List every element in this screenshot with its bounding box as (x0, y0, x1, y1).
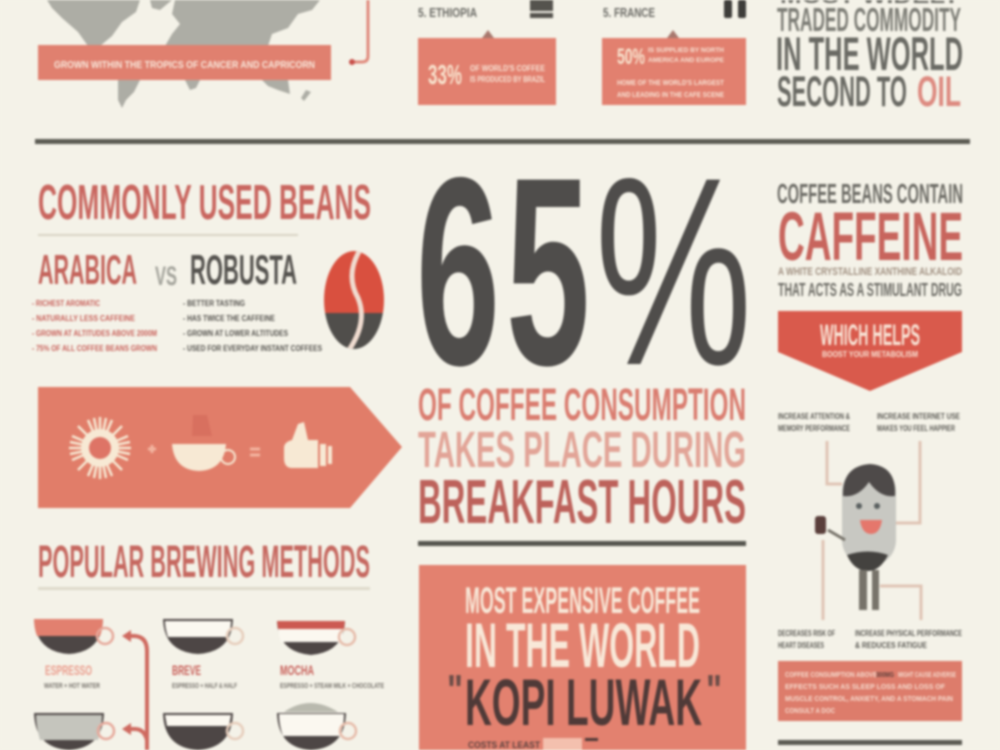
connector arrow from map (349, 0, 368, 65)
icon: France stat (724, 0, 746, 18)
consumer column: France: 5. FRANCE (603, 5, 655, 20)
bean comparison (32, 246, 390, 353)
equals sign (250, 449, 260, 455)
top-right statement (776, 0, 963, 116)
cup: breve (163, 619, 243, 690)
consumer column: France (602, 0, 746, 105)
panel: kopi luwak (419, 565, 746, 750)
note box: EFFECTS SUCH AS SLEEP LOSS AND LOSS OF (785, 684, 946, 691)
callout: France: AND LEADING IN THE CAFE SCENE (617, 92, 724, 99)
benefit labels: DECREASES RISK OF (778, 629, 835, 638)
top-right statement: OIL (917, 68, 961, 116)
arrow panel: sun + coffee = thumbs up (38, 387, 402, 508)
plus sign (148, 445, 156, 453)
callout: Ethiopia: 33% (428, 59, 462, 90)
robusta bullet list: - GROWN AT LOWER ALTITUDES (183, 329, 289, 338)
callout: France (602, 30, 746, 105)
icon: Ethiopia stat (530, 0, 553, 18)
cup: mocha: ESPRESSO + STEAM MILK + CHOCOLATE (280, 683, 384, 690)
caffeine heading (777, 178, 963, 300)
versus label: VS (155, 261, 177, 291)
cup: macchiato (163, 713, 243, 750)
note box: CONSULT A DOC (785, 708, 835, 715)
arabica bullet list: - GROWN AT ALTITUDES ABOVE 2000M (32, 329, 157, 338)
robusta bullet list: - USED FOR EVERYDAY INSTANT COFFEES (183, 344, 323, 353)
big number 65%: 6 (416, 121, 500, 421)
robusta bullet list: - BETTER TASTING (183, 299, 245, 308)
producer column: Ethiopia: 5. ETHIOPIA (418, 5, 477, 20)
arrows between cups (122, 630, 147, 750)
note box (778, 661, 962, 721)
map banner: GROWN WITHIN THE TROPICS OF CANCER AND CAPRICORN (54, 60, 315, 71)
cup: espresso: ESPRESSO (45, 662, 92, 678)
arabica bullet list: - RICHEST AROMATIC (32, 299, 100, 308)
panel: kopi luwak: " (447, 666, 463, 715)
icon: thumbs up (284, 422, 332, 468)
callout: Ethiopia (418, 30, 556, 105)
benefit labels: INCREASE ATTENTION & (778, 412, 850, 421)
cup: breve: BREVE (172, 662, 201, 678)
red pointer: which helps: BOOST YOUR METABOLISM (822, 350, 918, 359)
note box: MUSCLE CONTROL, ANXIETY, AND A STOMACH PAIN (785, 696, 953, 703)
arabica bullet list: - 75% OF ALL COFFEE BEANS GROWN (32, 344, 157, 353)
panel: kopi luwak: COSTS AT LEAST (468, 740, 540, 750)
callout: France: IS SUPPLIED BY NORTH (648, 48, 724, 54)
panel: kopi luwak: IN THE WORLD (465, 611, 700, 681)
connector lines around figure (823, 441, 921, 620)
arabica heading: ARABICA (38, 246, 137, 293)
callout: France: 50% (617, 44, 645, 69)
benefit labels: MAKES YOU FEEL HAPPIER (877, 424, 955, 433)
big number 65% (416, 121, 752, 421)
benefit labels (778, 412, 962, 650)
panel: kopi luwak: KOPI LUWAK (465, 665, 702, 739)
cup: americano (34, 713, 114, 750)
panel: kopi luwak: " (706, 666, 722, 715)
callout: Ethiopia: OF WORLD'S COFFEE (470, 64, 546, 73)
brewing methods (34, 619, 384, 750)
arabica bullet list: - NATURALLY LESS CAFFEINE (32, 314, 136, 323)
benefit labels: INCREASE PHYSICAL PERFORMANCE (855, 629, 962, 638)
big number 65%: % (595, 121, 752, 421)
robusta heading: ROBUSTA (190, 246, 297, 293)
red pointer: which helps (778, 311, 962, 391)
note box: COFFEE CONSUMPTION ABOVE (785, 672, 877, 679)
note box: 300MG (876, 672, 894, 679)
cup: mocha (277, 621, 384, 690)
benefit labels: & REDUCES FATIGUE (855, 641, 928, 650)
callout: France: HOME OF THE WORLD'S LARGEST (617, 80, 725, 87)
benefit labels: HEART DISEASES (778, 641, 824, 650)
heading: commonly used beans: COMMONLY USED BEANS (38, 176, 371, 230)
icon: sun (69, 417, 131, 479)
arabica bullet list (32, 299, 157, 353)
world map (47, 0, 320, 108)
map banner (38, 45, 331, 80)
cup: breve: ESPRESSO + HALF & HALF (172, 683, 238, 690)
breakfast statement: TAKES PLACE DURING (418, 421, 746, 478)
icon: coffee bean (322, 250, 386, 350)
callout: France: AMERICA AND EUROPE (648, 58, 724, 64)
text: POPULAR BREWING METHODS (38, 536, 370, 587)
panel: kopi luwak: MOST EXPENSIVE COFFEE (465, 580, 700, 621)
big number 65%: 5 (506, 121, 590, 421)
robusta bullet list: - HAS TWICE THE CAFFEINE (183, 314, 276, 323)
benefit labels: INCREASE INTERNET USE (877, 412, 961, 421)
producer column: Ethiopia (418, 0, 556, 105)
benefit labels: MEMORY PERFORMANCE (778, 424, 850, 433)
cup: espresso: WATER + HOT WATER (44, 683, 100, 690)
icon: coffee cup with steam (172, 415, 235, 471)
callout: Ethiopia: IS PRODUCED BY BRAZIL (470, 75, 545, 84)
character figure (815, 464, 896, 610)
cup: mocha: MOCHA (280, 662, 314, 678)
note box: MIGHT CAUSE ADVERSE (898, 672, 956, 679)
cup: cappuccino (277, 703, 356, 750)
breakfast statement (418, 379, 746, 537)
robusta bullet list (183, 299, 323, 353)
cup: espresso (34, 619, 113, 690)
